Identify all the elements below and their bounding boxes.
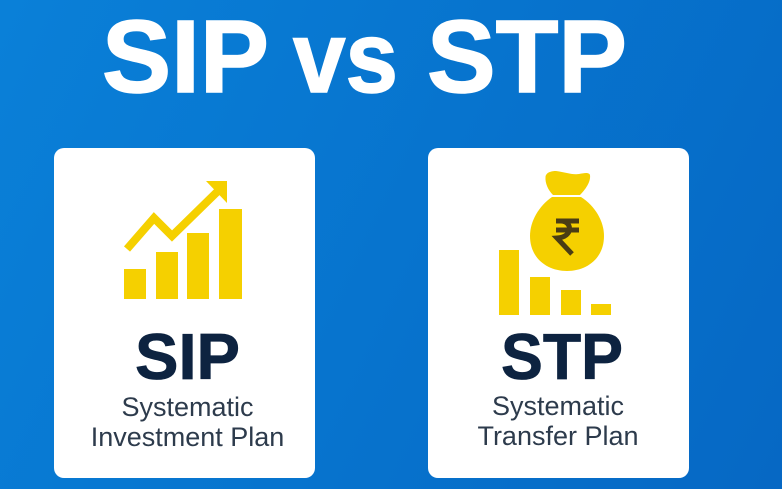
panel: SIP — [54, 148, 315, 478]
description: Systematic Investment Plan: Investment Plan — [91, 422, 284, 452]
title: STP — [427, 0, 627, 114]
title: SIP — [102, 0, 269, 114]
description: Systematic Transfer Plan: Transfer Plan — [477, 421, 639, 451]
description: Systematic Transfer Plan — [477, 391, 639, 451]
title: vs — [293, 2, 398, 114]
panel: STP — [428, 148, 689, 478]
description: Systematic Transfer Plan: Systematic — [492, 391, 624, 421]
description: Systematic Investment Plan — [91, 392, 284, 452]
icon: money bag with falling bars — [499, 171, 611, 315]
description: Systematic Investment Plan: Systematic — [121, 392, 254, 422]
icon: rising bar chart with arrow — [124, 181, 242, 299]
rupee glyph — [556, 221, 579, 254]
title — [102, 0, 627, 114]
